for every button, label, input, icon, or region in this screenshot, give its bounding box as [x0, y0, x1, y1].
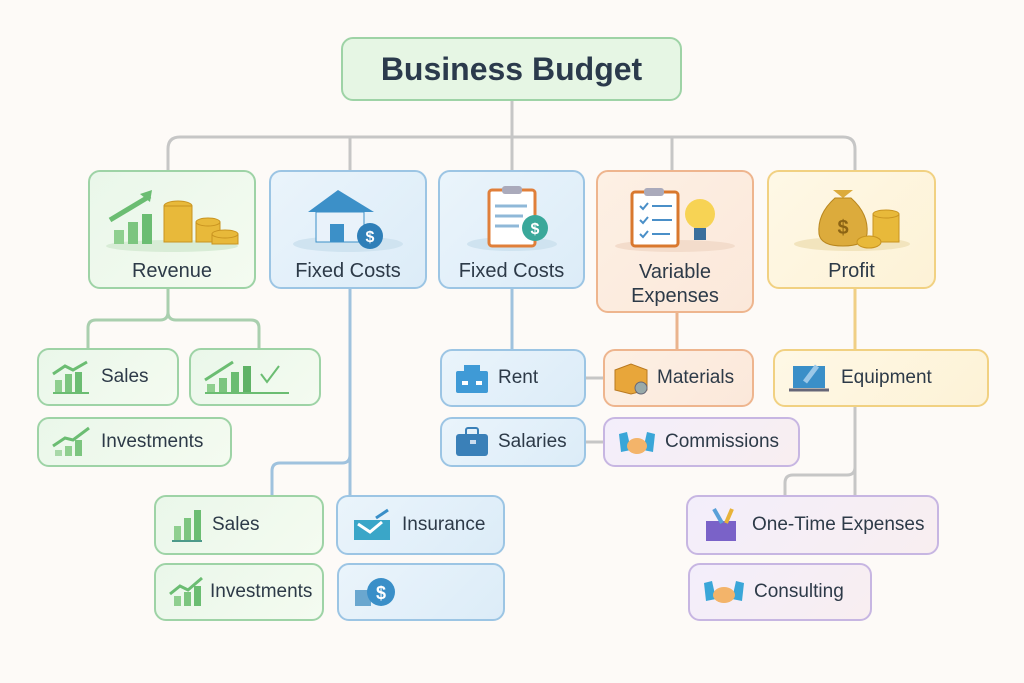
title: [341, 37, 682, 101]
card: revenue: Revenue: [132, 260, 212, 282]
card: fixed costs 2: Fixed Costs: [459, 260, 564, 282]
box: investments 2: [154, 563, 324, 621]
box: sales: Sales: [101, 366, 149, 387]
card: variable expenses: Expenses: [631, 285, 719, 307]
card: variable expenses: [596, 170, 754, 313]
card: profit: $: [837, 217, 848, 239]
box: one-time expenses: One-Time Expenses: [752, 514, 924, 535]
box: sales: [37, 348, 179, 406]
card: profit: [767, 170, 936, 289]
card: fixed costs 2: $: [530, 221, 539, 238]
box: salaries: Salaries: [498, 431, 567, 452]
box: commissions: Commissions: [665, 431, 779, 452]
box: sales 2: Sales: [212, 514, 260, 535]
card: fixed costs 1: Fixed Costs: [295, 260, 401, 282]
box: materials: Materials: [657, 367, 734, 388]
box: commissions: [603, 417, 800, 467]
box: sales 2: [154, 495, 324, 555]
box: dollar: $: [376, 583, 386, 603]
box: investments: [37, 417, 232, 467]
box: consulting: [688, 563, 872, 621]
box: one-time expenses: [686, 495, 939, 555]
box: insurance: Insurance: [402, 514, 485, 535]
box: materials: [603, 349, 754, 407]
card: fixed costs 1: [269, 170, 427, 289]
card: fixed costs 2: [438, 170, 585, 289]
box: consulting: Consulting: [754, 581, 844, 602]
card: fixed costs 1: $: [366, 229, 375, 246]
box: investments 2: Investments: [210, 581, 312, 602]
box: equipment: [773, 349, 989, 407]
box: investments: Investments: [101, 431, 203, 452]
title: Business Budget: [381, 50, 642, 86]
box: growth chart: [189, 348, 321, 406]
box: equipment: Equipment: [841, 367, 932, 388]
card: variable expenses: Variable: [639, 261, 711, 283]
card: profit: Profit: [828, 260, 875, 282]
box: rent: [440, 349, 586, 407]
box: rent: Rent: [498, 367, 538, 388]
box: insurance: [336, 495, 505, 555]
card: revenue: [88, 170, 256, 289]
box: salaries: [440, 417, 586, 467]
box: dollar: [337, 563, 505, 621]
